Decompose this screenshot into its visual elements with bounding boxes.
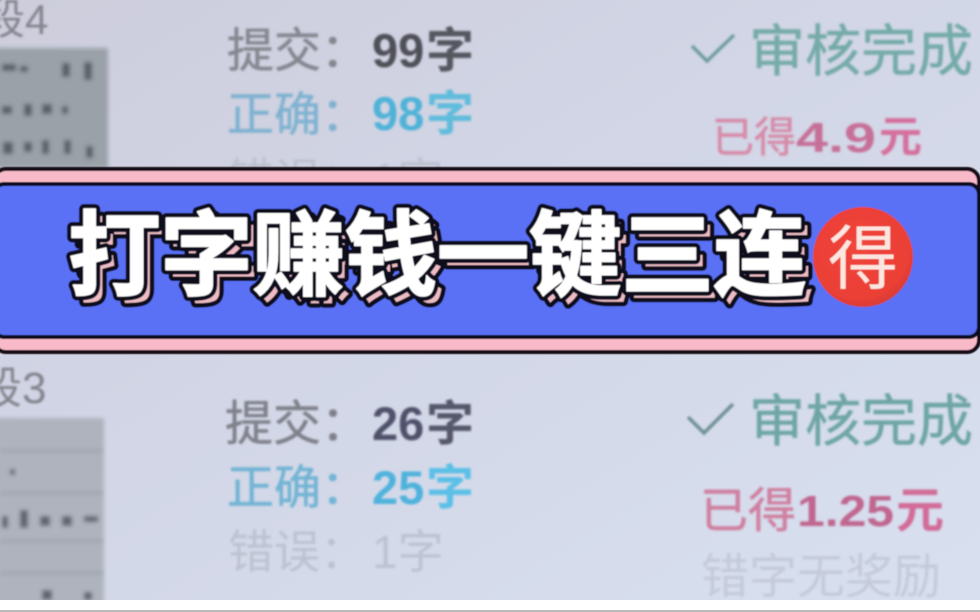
title: white layer: 打字赚钱一键三连 bbox=[68, 204, 806, 308]
handwriting thumbnail 4 bbox=[0, 48, 108, 168]
error count, cut off by banner bbox=[228, 154, 444, 206]
earned 1.25 yuan: 已得 bbox=[700, 485, 796, 538]
earned 1.25 yuan: 元 bbox=[896, 485, 944, 538]
error count 1 bbox=[228, 526, 444, 578]
earned 4.9 yuan: 元 bbox=[879, 114, 922, 162]
earned 1.25 yuan: 1.25 bbox=[797, 487, 894, 536]
review complete status: 审核完成 bbox=[749, 20, 973, 83]
title: shadow layer: 打字赚钱一键三连 bbox=[75, 211, 813, 315]
banner outer pink frame bbox=[0, 169, 979, 352]
submitted count 26: 26 bbox=[372, 397, 424, 450]
earned 4.9 yuan: 4.9 bbox=[796, 114, 876, 161]
earned 4.9 yuan bbox=[712, 114, 922, 162]
icon: red circle with 得: 得 bbox=[828, 220, 898, 298]
correct count 25: 25 bbox=[372, 461, 424, 514]
earned 1.25 yuan bbox=[700, 485, 944, 538]
submitted count 99: 提交： bbox=[227, 24, 368, 77]
correct count 98: 字 bbox=[426, 88, 474, 141]
banner blue fill bbox=[0, 184, 979, 337]
panel: title banner bbox=[0, 169, 979, 352]
earned 4.9 yuan: 已得 bbox=[712, 114, 796, 161]
bottom edge cover for clipped text bbox=[0, 600, 980, 610]
error count, cut off by banner: 1字 bbox=[372, 154, 444, 206]
icon: check mark bbox=[688, 404, 733, 433]
bottom white strip bbox=[0, 600, 980, 612]
error count, cut off by banner: 错误： bbox=[228, 154, 366, 206]
submitted count 26: 提交： bbox=[225, 398, 369, 451]
correct count 25: 字 bbox=[426, 462, 474, 515]
review complete status: 审核完成 bbox=[749, 390, 973, 453]
correct count 25 bbox=[227, 461, 474, 515]
icon: check mark bbox=[692, 35, 734, 61]
panel: lower record (section 3) bbox=[0, 364, 973, 604]
error count 1: 1字 bbox=[372, 526, 444, 578]
submitted count 99: 字 bbox=[426, 25, 474, 78]
submitted count 26: 字 bbox=[426, 398, 474, 451]
correct count 98 bbox=[227, 87, 474, 141]
panel: upper record (section 4) bbox=[0, 0, 973, 206]
submitted count 26 bbox=[225, 397, 474, 451]
submitted count 99 bbox=[227, 24, 474, 78]
submitted count 99: 99 bbox=[372, 24, 424, 77]
handwriting thumbnail 3 bbox=[0, 418, 104, 604]
error count 1: 错误： bbox=[228, 526, 366, 578]
correct count 98: 正确： bbox=[227, 88, 368, 141]
no reward for wrong characters note: 错字无奖励 bbox=[701, 551, 941, 604]
icon: red circle with 得 bbox=[813, 207, 913, 307]
correct count 98: 98 bbox=[372, 87, 424, 140]
title: black outline layer: 打字赚钱一键三连 bbox=[68, 204, 806, 308]
correct count 25: 正确： bbox=[227, 461, 368, 514]
